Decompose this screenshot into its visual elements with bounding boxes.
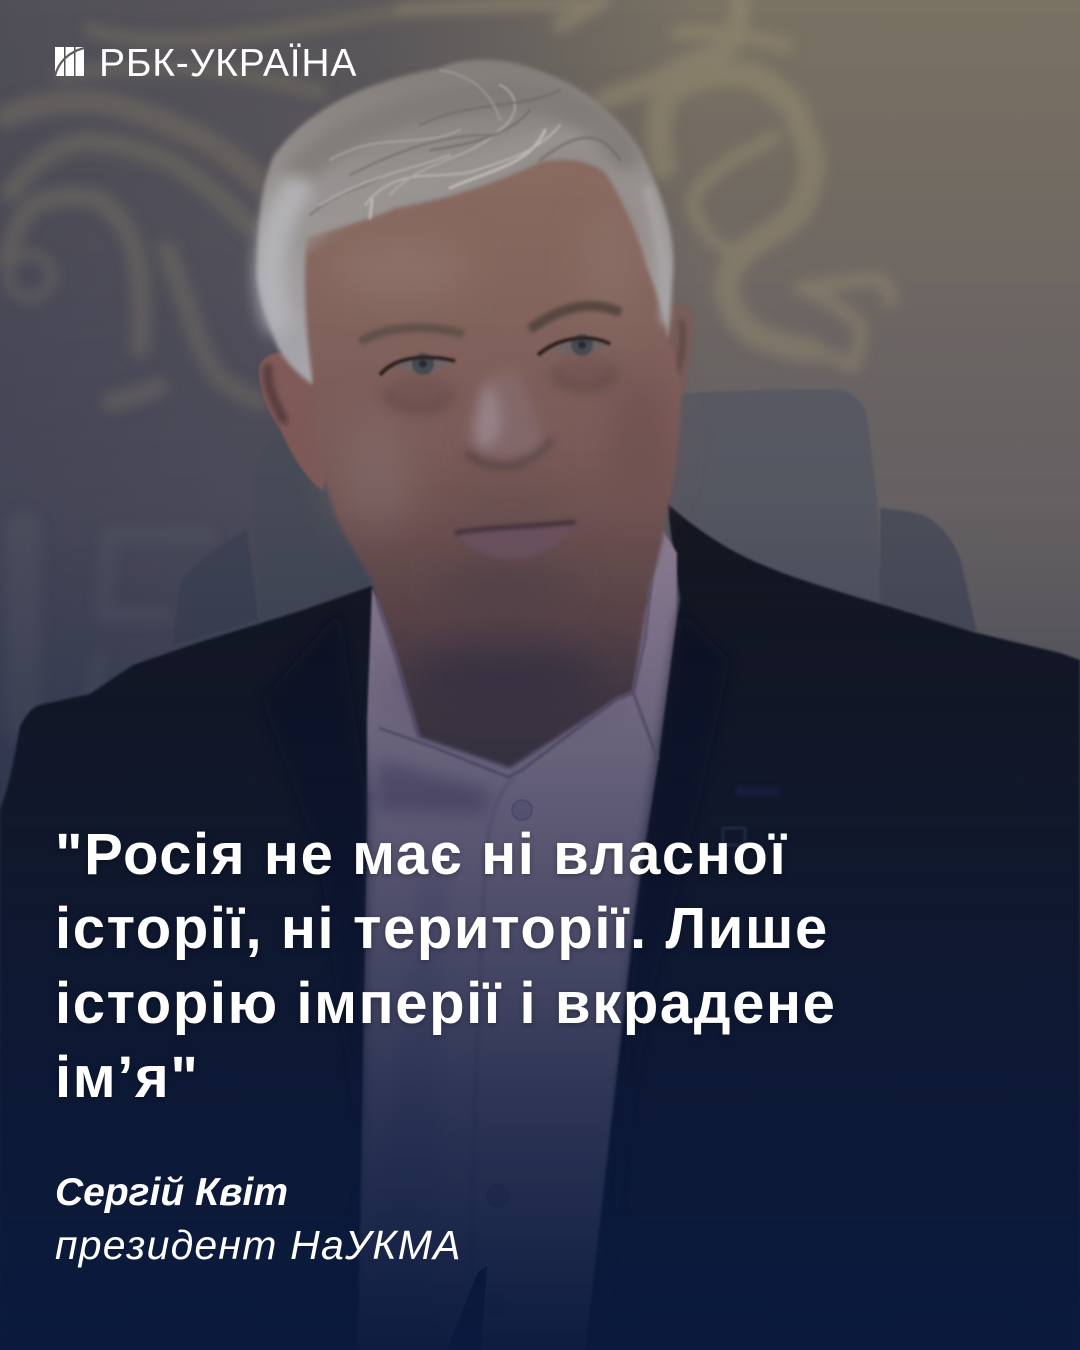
author attribution: Сергій Квіт	[55, 1171, 288, 1214]
nose	[467, 370, 553, 466]
shirt shading	[360, 760, 490, 1350]
collar lines	[377, 580, 658, 777]
pocket mark	[736, 787, 779, 796]
icon: logo mark	[54, 47, 84, 76]
lapel shading	[262, 610, 730, 1350]
shirt buttons	[483, 800, 532, 1316]
face shading	[330, 205, 668, 710]
jacket	[0, 503, 1080, 1350]
shirt	[358, 527, 677, 1350]
author attribution: президент НаУКМА	[55, 1222, 462, 1268]
shirt placket	[470, 777, 515, 1350]
background ornament	[7, 0, 890, 725]
quote text: історії, ні території. Лише	[55, 896, 829, 961]
quote text: ім’я"	[55, 1045, 199, 1110]
eyes	[380, 334, 610, 375]
logo: РБК-Україна: РБК-УКРАЇНА	[99, 42, 357, 85]
mouth	[455, 522, 575, 559]
hair	[257, 60, 673, 385]
ears	[259, 303, 694, 491]
eye sockets and bags	[383, 354, 619, 410]
eyebrows	[363, 306, 617, 340]
chair	[173, 389, 977, 645]
author attribution	[55, 1171, 462, 1268]
hair strands	[270, 96, 665, 320]
face and neck	[305, 160, 681, 768]
quote text: "Росія не має ні власної	[55, 822, 787, 887]
lapel pin	[723, 828, 745, 845]
quote text: історію імперії і вкрадене	[55, 971, 836, 1036]
pen	[447, 1266, 487, 1350]
quote text	[55, 822, 836, 1110]
